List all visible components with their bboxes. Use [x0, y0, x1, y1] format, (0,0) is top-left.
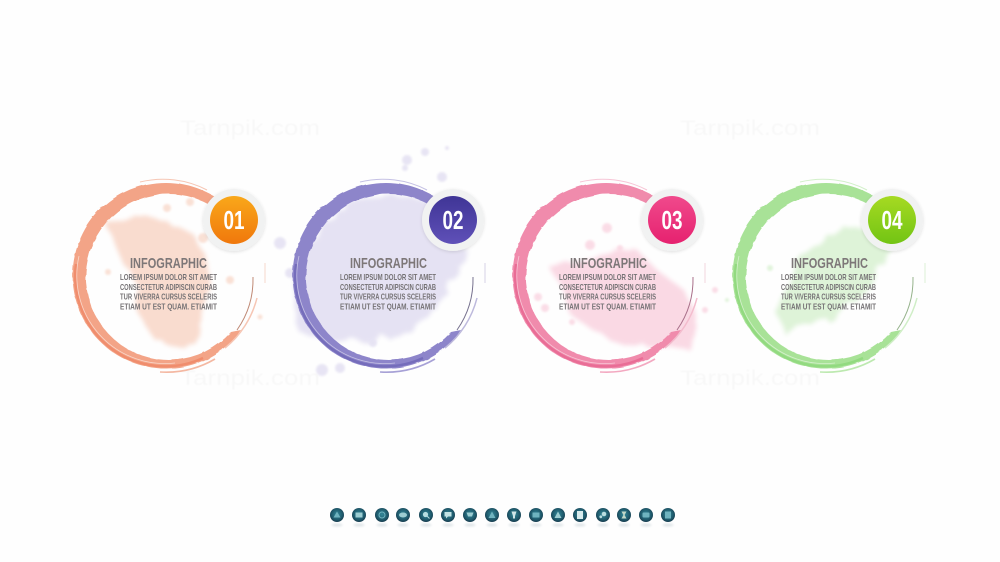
icon 13 — [596, 508, 610, 522]
icon 14 — [617, 508, 631, 522]
body text: LOREM IPSUM DOLOR SIT AMET — [340, 272, 437, 282]
brush ring — [293, 179, 485, 372]
number badge 02 — [422, 189, 484, 251]
body text: TUR VIVERRA CURSUS SCELERIS — [781, 292, 876, 302]
body text: ETIAM UT EST QUAM. ETIAMIT — [340, 302, 437, 312]
icon 12 — [573, 508, 587, 522]
body text — [781, 272, 877, 312]
watercolor wash — [105, 198, 262, 350]
watermark: bottom left: Tarnpik.com — [180, 367, 320, 390]
body text: TUR VIVERRA CURSUS SCELERIS — [559, 292, 656, 302]
panel: step 03 pink — [513, 179, 718, 372]
number badge 03: 03 — [662, 205, 682, 235]
watercolor wash — [725, 224, 893, 337]
icon 11 — [551, 508, 565, 522]
icon 16 — [661, 508, 675, 522]
watercolor wash — [534, 223, 718, 350]
icon 3 — [375, 508, 389, 522]
icon 9 — [507, 508, 521, 522]
number badge 02: 02 — [442, 205, 464, 235]
number badge 04 — [861, 189, 923, 251]
body text: LOREM IPSUM DOLOR SIT AMET — [120, 272, 218, 282]
watercolor wash — [274, 146, 470, 376]
icon 5 — [419, 508, 433, 522]
body text: CONSECTETUR ADIPISCIN CURAB — [340, 282, 436, 292]
brush ring — [73, 179, 265, 372]
body text — [340, 272, 437, 312]
watermark: bottom right: Tarnpik.com — [680, 367, 820, 390]
body text: LOREM IPSUM DOLOR SIT AMET — [781, 272, 877, 282]
icon 2 — [352, 508, 366, 522]
brush ring — [513, 179, 705, 372]
body text: TUR VIVERRA CURSUS SCELERIS — [120, 292, 217, 302]
number badge 04: 04 — [882, 205, 903, 235]
icon 1 — [330, 508, 344, 522]
panel: step 04 green — [725, 179, 925, 372]
icon 4 — [396, 508, 410, 522]
icon 8 — [485, 508, 499, 522]
number badge 01 — [203, 189, 265, 251]
heading: INFOGRAPHIC — [791, 255, 868, 272]
number badge 03 — [641, 189, 703, 251]
body text: ETIAM UT EST QUAM. ETIAMIT — [781, 302, 877, 312]
watermark: top left: Tarnpik.com — [180, 117, 320, 140]
heading: INFOGRAPHIC — [570, 255, 647, 272]
heading: INFOGRAPHIC — [130, 255, 207, 272]
icon 7 — [463, 508, 477, 522]
icon 15 — [639, 508, 653, 522]
body text — [120, 272, 218, 312]
icon 10 — [529, 508, 543, 522]
body text — [559, 272, 657, 312]
number badge 01: 01 — [224, 205, 244, 235]
icon reflections — [332, 523, 674, 527]
icon 6 — [441, 508, 455, 522]
heading: INFOGRAPHIC — [350, 255, 427, 272]
icon row — [330, 508, 675, 527]
body text: ETIAM UT EST QUAM. ETIAMIT — [559, 302, 657, 312]
body text: CONSECTETUR ADIPISCIN CURAB — [559, 282, 656, 292]
brush ring — [733, 179, 925, 372]
body text: TUR VIVERRA CURSUS SCELERIS — [340, 292, 436, 302]
panel: step 01 orange — [73, 179, 265, 372]
body text: CONSECTETUR ADIPISCIN CURAB — [781, 282, 876, 292]
panel: step 02 purple — [274, 146, 485, 376]
watermark: top right: Tarnpik.com — [680, 117, 820, 140]
body text: CONSECTETUR ADIPISCIN CURAB — [120, 282, 217, 292]
body text: ETIAM UT EST QUAM. ETIAMIT — [120, 302, 218, 312]
body text: LOREM IPSUM DOLOR SIT AMET — [559, 272, 657, 282]
